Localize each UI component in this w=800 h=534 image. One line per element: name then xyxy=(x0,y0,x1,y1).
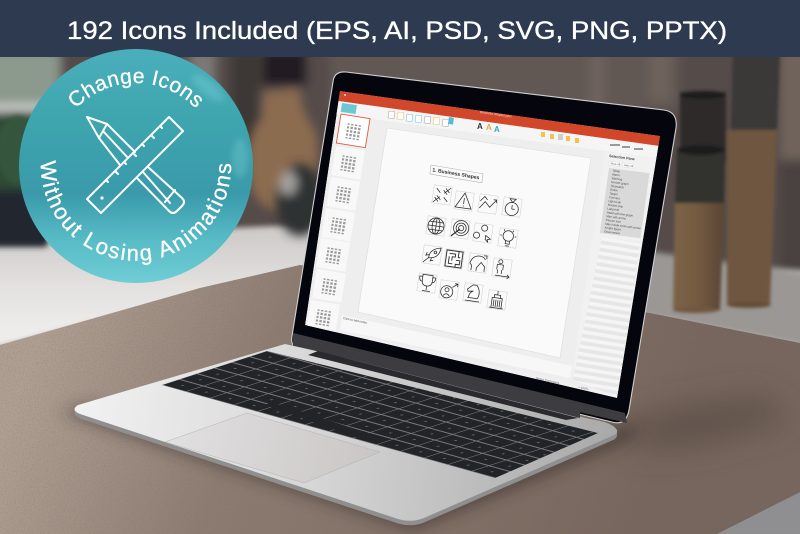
table surface xyxy=(0,225,800,534)
pencil xyxy=(87,117,184,213)
object list: Globe xyxy=(610,188,618,193)
show all and hide all buttons: Hide All xyxy=(624,163,634,168)
icon: light bulb xyxy=(498,228,518,248)
plant and dark pot at left xyxy=(0,116,48,247)
keyboard xyxy=(162,351,598,478)
icon: chess knight xyxy=(463,283,483,303)
selection pane: Selection Pane xyxy=(609,154,635,161)
laptop screen xyxy=(305,91,660,398)
ribbon toolbar: A xyxy=(494,125,500,134)
icon: man with arrow xyxy=(492,258,512,279)
status bar xyxy=(305,325,617,398)
tall dark and brown vases at right xyxy=(673,50,780,313)
laptop lid and bezel xyxy=(292,72,676,423)
object list xyxy=(600,168,650,238)
ribbon title bar: Business Shapes.pptx xyxy=(480,110,512,118)
icon: globe xyxy=(426,216,446,236)
icon grid xyxy=(417,185,522,310)
status bar: Notes Comments xyxy=(536,376,560,385)
badge text: top arc: Change Icons xyxy=(69,70,202,107)
laptop base xyxy=(74,344,617,525)
object list: Warning xyxy=(611,176,623,182)
blurred brown vase xyxy=(247,88,318,210)
object list: Head with line graph xyxy=(607,210,634,218)
empty striped rows xyxy=(573,237,640,397)
icon: rocket xyxy=(422,245,442,265)
ribbon title bar xyxy=(338,91,660,146)
ribbon toolbar: A xyxy=(486,123,492,132)
badge text: bottom arc: Without Losing Animations xyxy=(40,160,232,265)
icon: stopwatch xyxy=(502,197,522,217)
object list: Man with arrow xyxy=(606,214,627,221)
object list: Rocket ship xyxy=(608,203,624,209)
header title: 192 Icons Included (EPS, AI, PSD, SVG, PNG, PPTX) xyxy=(67,17,727,45)
icon: government building xyxy=(487,290,507,310)
status bar: + 100% xyxy=(578,385,589,391)
object list: Man inside circle with arrow xyxy=(605,222,642,230)
teal badge xyxy=(19,49,253,283)
object list: Person icon xyxy=(606,218,622,224)
slide title xyxy=(430,165,483,183)
hinge strip over base xyxy=(312,345,580,418)
notes pane: Click to add notes xyxy=(343,316,368,325)
icon: broken link xyxy=(432,185,452,205)
icon: target xyxy=(450,219,470,239)
icon: growth lines xyxy=(478,194,498,214)
icon: warning triangle xyxy=(454,191,474,211)
object list: Growth graph xyxy=(611,180,629,186)
slide canvas xyxy=(358,128,591,358)
icon: head with graph xyxy=(468,253,488,273)
ribbon toolbar: A xyxy=(477,122,483,131)
object list: Sleep xyxy=(612,169,621,174)
object list: Stopwatch xyxy=(610,184,625,190)
show all and hide all buttons: Show All xyxy=(610,161,621,167)
icon: person with rising arrow xyxy=(439,280,459,300)
show all and hide all buttons xyxy=(608,161,634,168)
object list: Light bulb xyxy=(608,199,622,205)
object list: Government xyxy=(604,229,621,235)
hinge strip xyxy=(293,333,627,423)
blurred small grey vase xyxy=(276,164,324,236)
icon: process circles xyxy=(473,223,493,243)
object list: Target xyxy=(609,191,618,196)
woven table mat xyxy=(0,250,800,534)
selection pane xyxy=(600,154,656,398)
notes pane xyxy=(340,315,572,378)
slide title: 1. Business Shapes xyxy=(432,167,480,181)
object list: Labyrinth xyxy=(607,207,620,212)
object list: Connect xyxy=(609,195,620,201)
ruler xyxy=(87,117,183,213)
thumbnail 1 selected xyxy=(336,114,370,148)
laptop shadow on mat xyxy=(60,405,640,530)
hinge slot xyxy=(308,351,578,420)
laptop xyxy=(292,72,676,423)
object list: Alarm xyxy=(612,172,621,177)
header bar xyxy=(0,0,800,57)
icon: trophy xyxy=(417,273,437,293)
icon: maze xyxy=(444,249,464,269)
object list: Knight figure xyxy=(604,226,622,232)
ribbon toolbar xyxy=(336,101,659,158)
space bar xyxy=(265,402,380,443)
icon: crossed pencil and ruler xyxy=(87,117,184,213)
trackpad xyxy=(165,413,380,483)
slide thumbnails panel xyxy=(306,114,370,334)
